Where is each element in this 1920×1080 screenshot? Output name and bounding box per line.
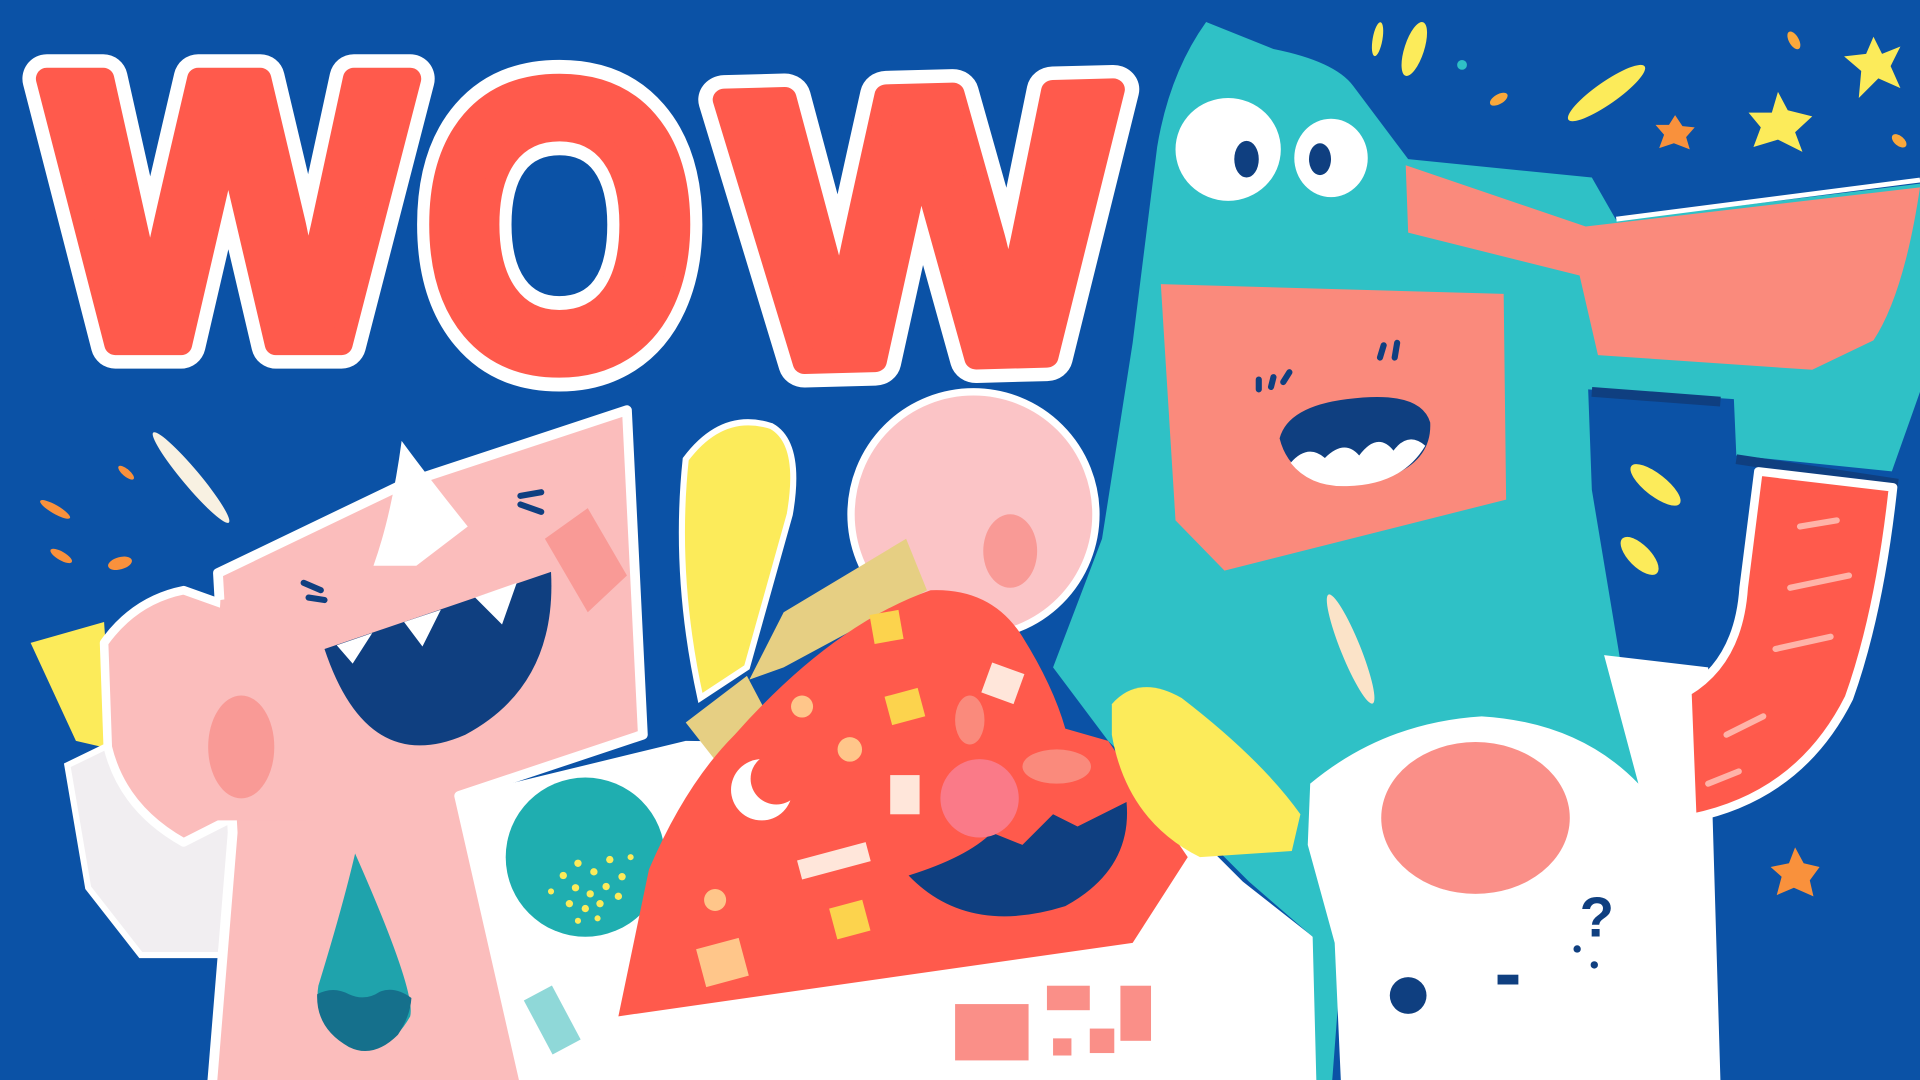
letter fills [47,0,1126,448]
speckle blob [1390,977,1427,1014]
arm highlight [1616,180,1920,219]
face panel [1161,284,1506,571]
letter outlines: W [722,5,1126,447]
letter outlines [47,0,1126,448]
mouth [1280,397,1430,486]
eyes [304,492,541,600]
taco mouth [909,802,1127,916]
arm shadow strokes [1592,392,1898,484]
character: red arm tube [1687,471,1893,818]
dots [1498,945,1598,984]
character: taco [618,539,1188,1016]
accent stick [1320,591,1382,707]
character: teal monster [1053,22,1920,1080]
pink ball [1381,742,1570,894]
letter fills: O [425,4,695,448]
ear [104,590,276,842]
letter outlines: O [425,4,695,448]
eye: left [1176,98,1281,201]
ear join [208,588,306,820]
stars and confetti [38,19,1909,896]
wing: white [67,744,245,955]
ear blush [208,696,274,798]
panel: white base centre [459,741,1325,1080]
cheek [545,508,627,612]
toppings [696,610,1091,987]
teeth [337,583,517,664]
ear: pink circle [851,392,1096,637]
title: WOW [47,0,1126,448]
panel: white body right [1308,655,1720,1080]
letter fills: W [47,0,414,426]
arm: salmon upper arm [1406,165,1920,370]
eye: right [1294,119,1368,197]
pie: yellow [1112,687,1300,857]
crescent [731,753,802,820]
bottom pink patches [955,986,1151,1060]
pill: yellow [682,422,793,698]
face marks [1259,343,1397,389]
wing: yellow [31,622,113,749]
teal drop [317,853,411,1051]
character: pink elephant [104,410,643,1080]
teal ball [506,778,665,937]
mouth [324,572,551,745]
teal tag [524,985,581,1055]
question mark: ? [1580,886,1614,949]
letter outlines: W [47,0,414,426]
horn [373,441,468,566]
letter fills: W [722,5,1126,447]
white stick [147,427,235,528]
